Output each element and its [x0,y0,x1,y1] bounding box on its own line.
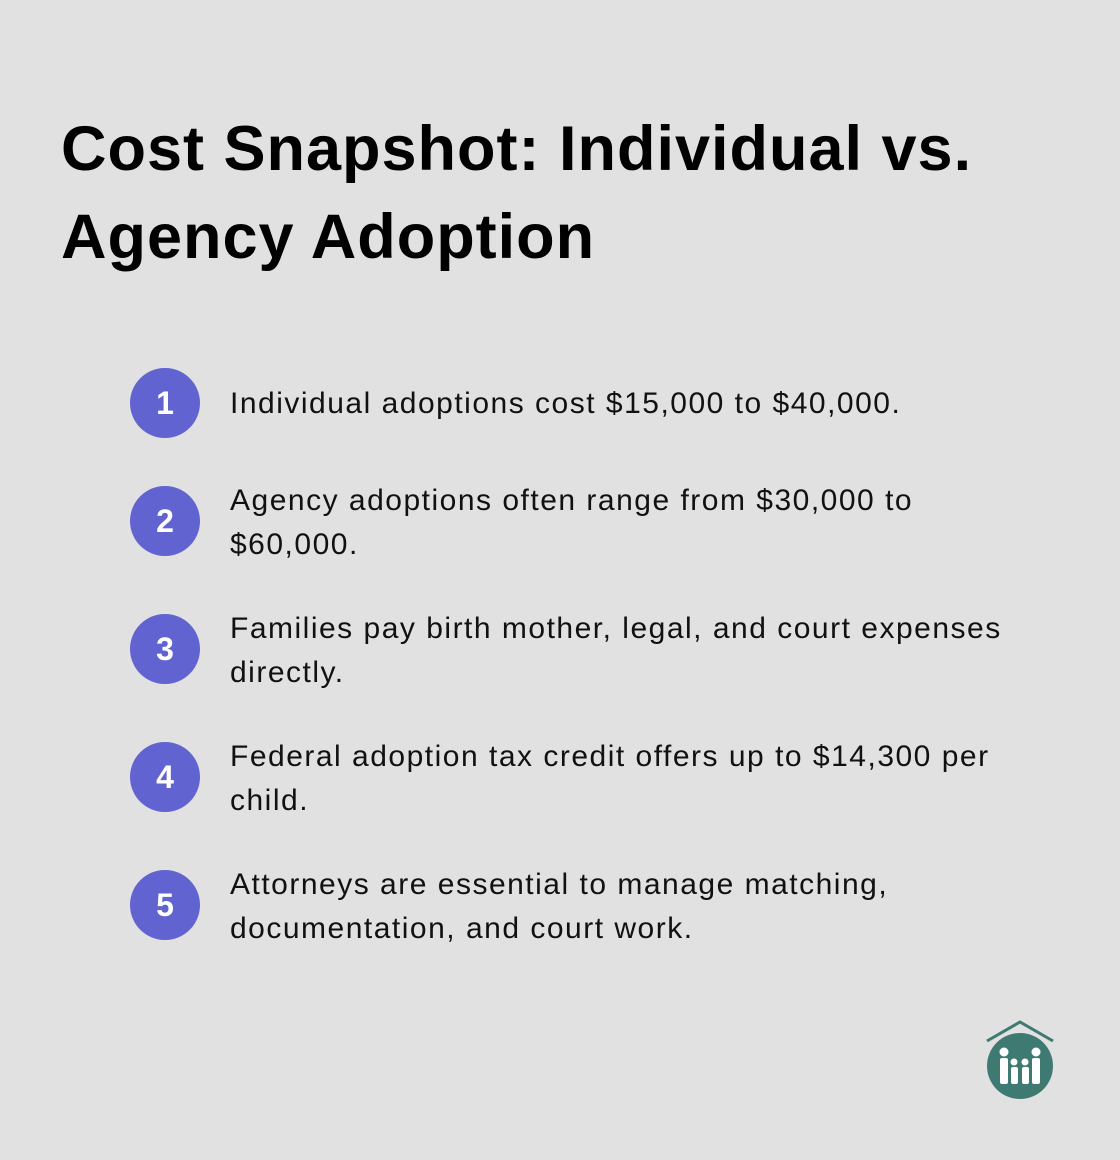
item 4: Federal adoption tax credit offers up to $14,300 per [230,740,990,773]
item 1 [130,368,901,438]
item 3 [130,612,1002,689]
logo [986,1020,1054,1099]
item 5: 5 [156,887,174,923]
item 5: Attorneys are essential to manage matching, [230,868,888,901]
item 5 [130,868,888,945]
item 3: directly. [230,656,345,689]
title [61,114,972,272]
item 4: child. [230,784,309,817]
item 3: 3 [156,631,174,667]
item 2 [130,484,913,561]
item 1: 1 [156,385,174,421]
item 5: documentation, and court work. [230,912,694,945]
item 2: 2 [156,503,174,539]
item 2: Agency adoptions often range from $30,000 to [230,484,913,517]
item 2: $60,000. [230,528,359,561]
item 4 [130,740,990,817]
item 4: 4 [156,759,174,795]
item 3: Families pay birth mother, legal, and court expenses [230,612,1002,645]
item 1: Individual adoptions cost $15,000 to $40,000. [230,387,901,420]
title: Agency Adoption [61,202,595,272]
title: Cost Snapshot: Individual vs. [61,114,972,184]
